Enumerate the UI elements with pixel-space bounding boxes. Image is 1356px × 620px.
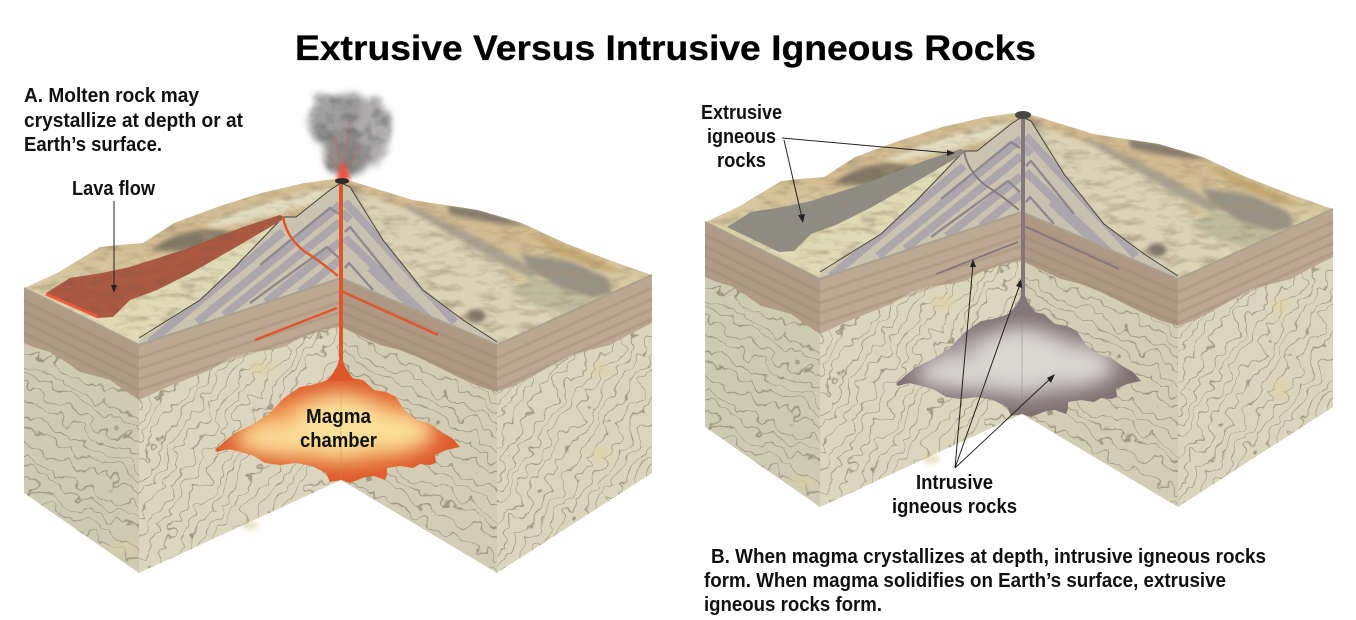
heading A: Earth’s surface.	[24, 134, 162, 156]
extrusive lava rock	[727, 149, 966, 252]
panel A: erupting volcano block diagram	[0, 85, 670, 590]
label: lava flow: Lava flow	[72, 178, 155, 200]
intrusive conduit and dikes	[936, 113, 1119, 315]
label: extrusive igneous rocks: igneous	[707, 126, 776, 148]
title: Extrusive Versus Intrusive Igneous Rocks	[295, 29, 1036, 68]
label: intrusive igneous rocks: igneous rocks	[892, 496, 1017, 518]
label: intrusive igneous rocks	[892, 472, 1017, 518]
arrow: lava flow	[111, 201, 117, 293]
arrows: intrusive	[955, 259, 1055, 468]
label: intrusive igneous rocks: Intrusive	[916, 472, 993, 494]
volcanic ash cloud	[309, 93, 390, 184]
block cross-section A	[0, 178, 670, 590]
label: magma chamber: Magma	[306, 406, 372, 428]
crater	[1015, 111, 1031, 119]
label: extrusive igneous rocks: Extrusive	[701, 102, 782, 124]
caption B: B. When magma crystallizes at depth, intrusive igneous rocks	[711, 546, 1266, 568]
intrusive chamber	[896, 312, 1141, 417]
heading A: crystallize at depth or at	[24, 110, 243, 132]
panel B: solidified igneous rocks block diagram	[671, 102, 1351, 616]
arrows: extrusive	[782, 138, 955, 223]
label: magma chamber: chamber	[300, 430, 377, 452]
lava flow	[46, 215, 285, 318]
label: magma chamber	[300, 406, 377, 452]
block cross-section B	[671, 112, 1351, 524]
heading A: A. Molten rock may	[24, 85, 200, 107]
caption B: igneous rocks form.	[704, 594, 882, 616]
caption B: form. When magma solidifies on Earth’s surface, extrusive	[704, 570, 1226, 592]
caption B	[704, 546, 1266, 616]
label: extrusive igneous rocks: rocks	[717, 150, 766, 172]
label: extrusive igneous rocks	[701, 102, 782, 172]
heading A	[24, 85, 243, 156]
magma chamber	[215, 378, 460, 483]
magma conduit and dikes	[255, 183, 438, 381]
